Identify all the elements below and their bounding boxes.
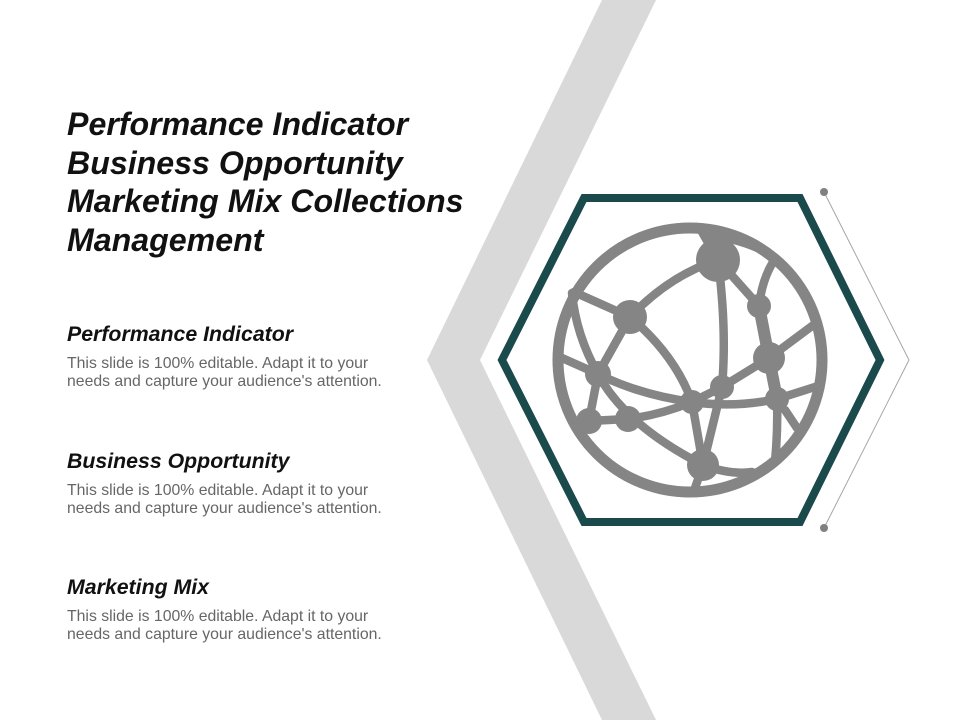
heading: Business Opportunity xyxy=(67,449,289,473)
title xyxy=(67,106,463,258)
body text: needs and capture your audience's attention. xyxy=(67,500,382,517)
body text xyxy=(67,482,382,517)
body text: This slide is 100% editable. Adapt it to your xyxy=(67,608,368,625)
heading: Marketing Mix xyxy=(67,575,209,599)
text block: marketing mix xyxy=(67,575,382,643)
body text xyxy=(67,608,382,643)
title: Performance Indicator xyxy=(67,106,408,142)
body text: This slide is 100% editable. Adapt it to your xyxy=(67,355,368,372)
body text: This slide is 100% editable. Adapt it to your xyxy=(67,482,368,499)
title: Marketing Mix Collections xyxy=(67,183,463,219)
body text: needs and capture your audience's attention. xyxy=(67,626,382,643)
title: Business Opportunity xyxy=(67,145,403,181)
text block: performance indicator xyxy=(67,322,382,390)
heading: Performance Indicator xyxy=(67,322,293,346)
body text: needs and capture your audience's attention. xyxy=(67,373,382,390)
title: Management xyxy=(67,222,263,258)
text block: business opportunity xyxy=(67,449,382,517)
body text xyxy=(67,355,382,390)
